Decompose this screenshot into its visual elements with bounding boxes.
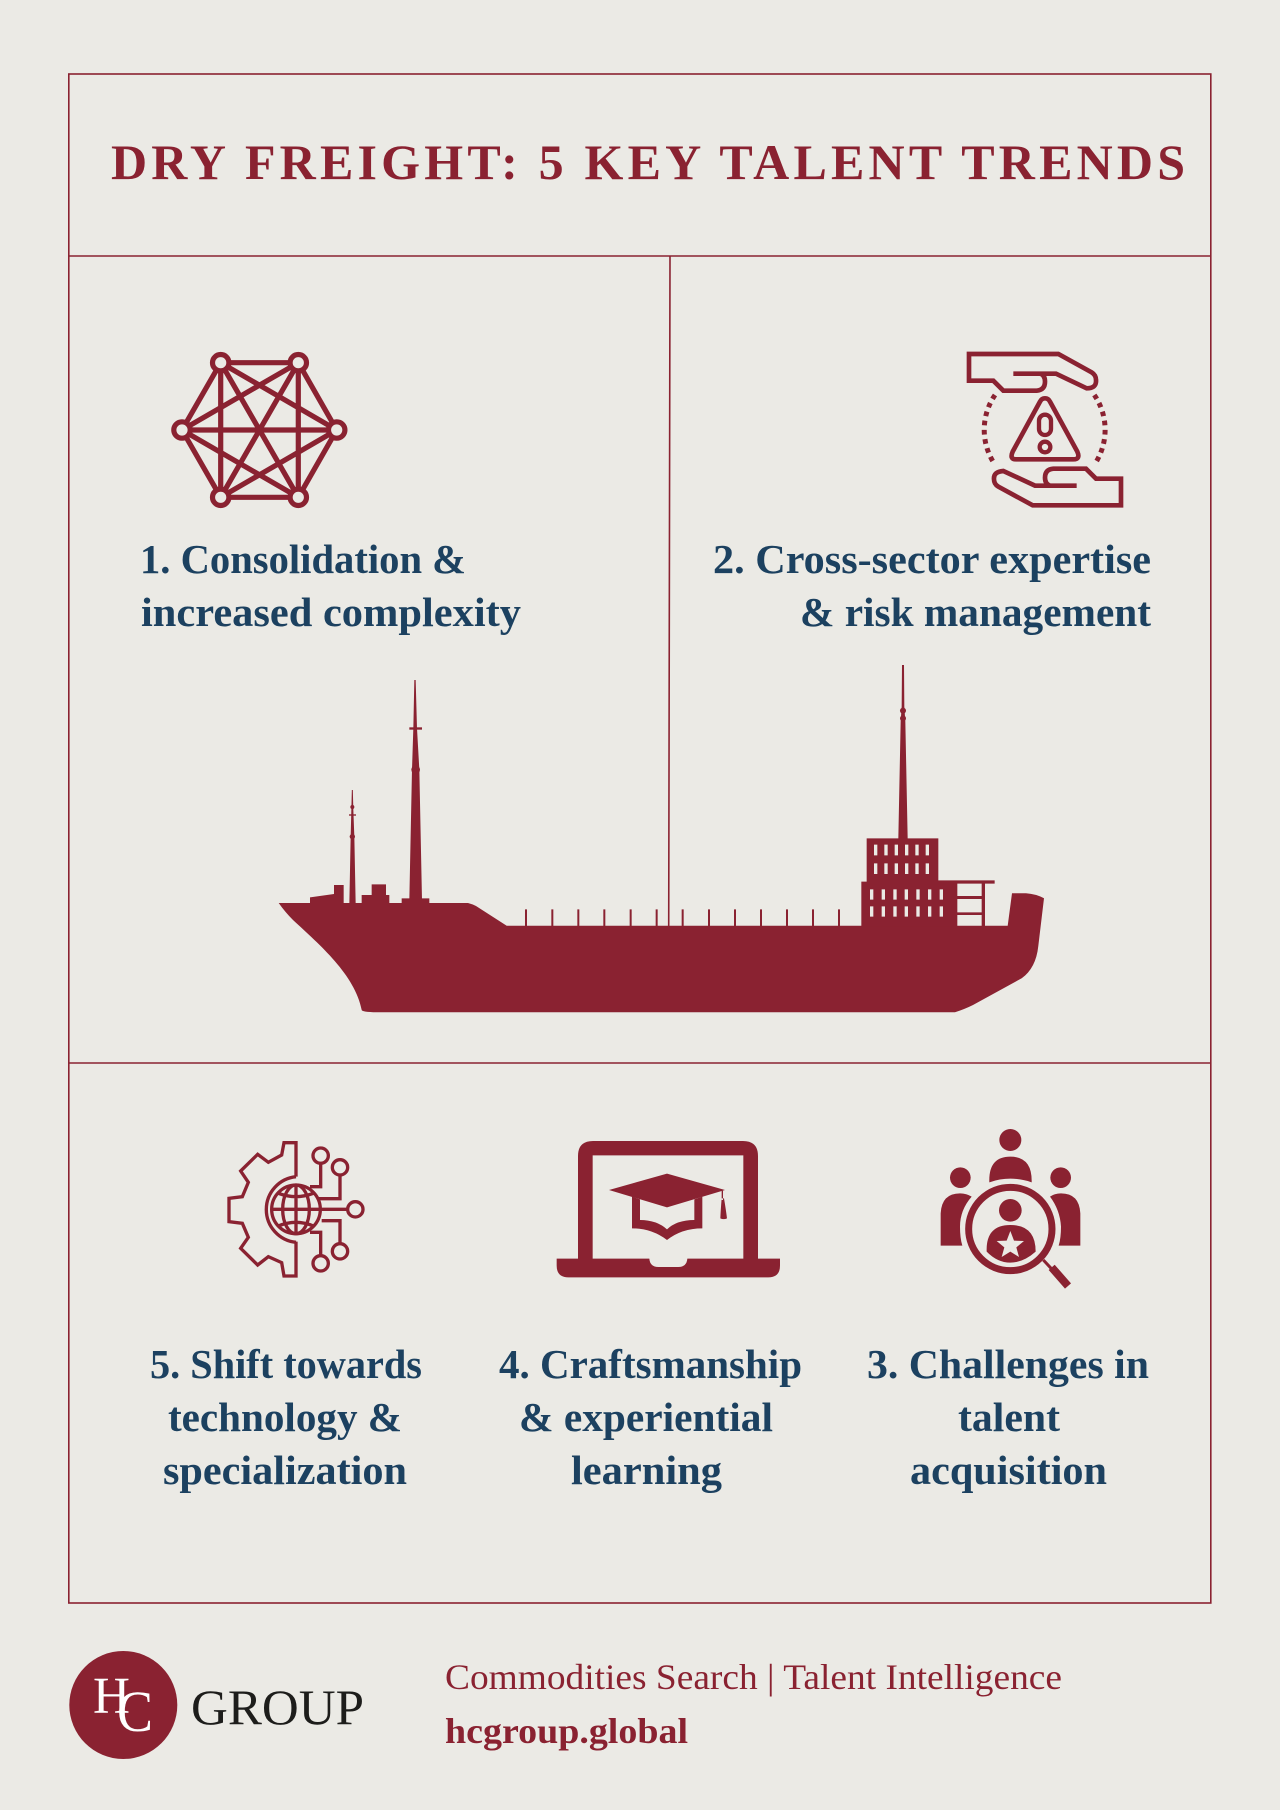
heading: trend 4: & experiential <box>519 1394 773 1440</box>
icon: network hexagon <box>174 354 345 505</box>
heading: trend 5: specialization <box>163 1447 407 1493</box>
tagline: Commodities Search | Talent Intelligence <box>445 1657 1062 1697</box>
website: hcgroup.global <box>445 1711 688 1751</box>
logo: HC Group: C <box>117 1679 153 1744</box>
heading: trend 2: 2. Cross-sector expertise <box>713 536 1151 582</box>
logo: HC Group: GROUP <box>191 1679 364 1735</box>
heading: trend 4 <box>499 1341 802 1493</box>
heading: trend 4: 4. Craftsmanship <box>499 1341 802 1387</box>
ship illustration <box>279 665 1044 1012</box>
logo: HC Group <box>69 1651 364 1759</box>
heading: trend 1: increased complexity <box>141 589 522 635</box>
panel: trend 1 <box>140 354 522 635</box>
panel: trend 5 <box>150 1143 422 1493</box>
icon: laptop with graduation cap <box>557 1141 780 1277</box>
icon: gear with globe and circuit <box>229 1143 363 1276</box>
panel: trend 2 <box>713 354 1151 635</box>
logo: HC Group: H <box>93 1668 130 1725</box>
heading: trend 3: 3. Challenges in <box>867 1341 1149 1387</box>
heading: trend 4: learning <box>571 1447 723 1493</box>
heading: trend 3 <box>867 1341 1149 1493</box>
heading: trend 2: & risk management <box>800 589 1151 635</box>
bow structures and masts <box>310 680 658 927</box>
icon: hands protecting warning sign <box>969 354 1121 505</box>
icon: people under magnifying glass <box>941 1129 1080 1286</box>
heading: trend 5: 5. Shift towards <box>150 1341 422 1387</box>
heading: trend 5 <box>150 1341 422 1493</box>
heading: trend 1: 1. Consolidation & <box>140 536 466 582</box>
heading: trend 3: talent <box>958 1394 1060 1440</box>
heading: trend 2 <box>713 536 1151 635</box>
stern tower and railing <box>682 665 995 927</box>
heading: trend 3: acquisition <box>910 1447 1107 1493</box>
ship hull <box>279 893 1044 1012</box>
title: DRY FREIGHT: 5 KEY TALENT TRENDS <box>111 134 1185 190</box>
frame with dividers <box>69 74 1211 1603</box>
panel: trend 4 <box>499 1141 802 1493</box>
panel: trend 3 <box>867 1129 1149 1493</box>
heading: trend 1 <box>140 536 522 635</box>
heading: trend 5: technology & <box>168 1394 402 1440</box>
